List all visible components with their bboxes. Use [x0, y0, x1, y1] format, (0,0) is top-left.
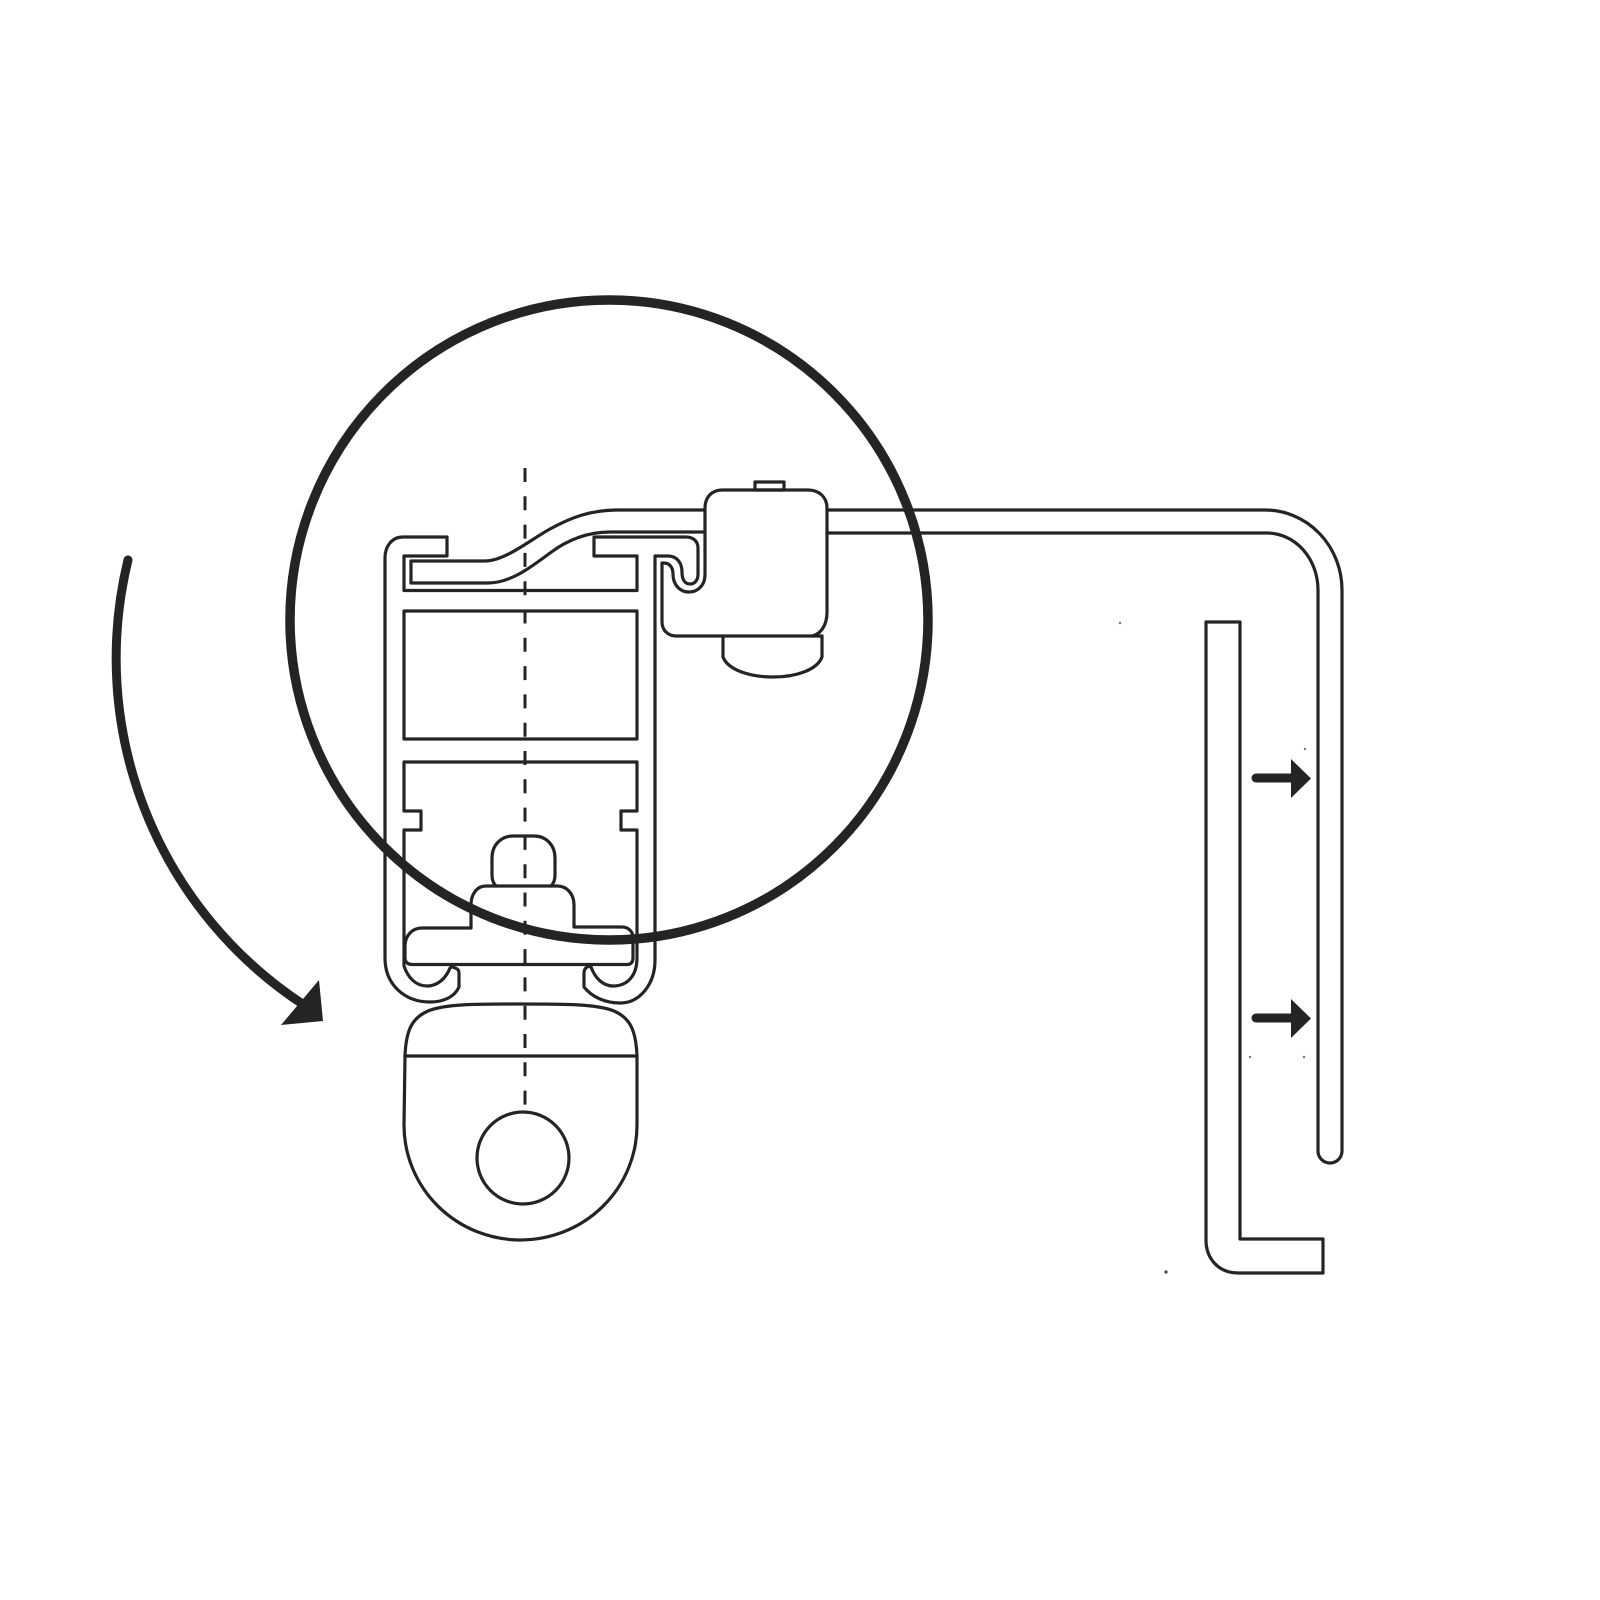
clip block — [662, 482, 827, 677]
slider body — [405, 886, 633, 964]
wall bracket arm — [411, 510, 1342, 1163]
large highlight circle — [290, 300, 928, 940]
track profile — [385, 537, 698, 1003]
mounting plate — [1206, 622, 1323, 1273]
outer wall and lips — [385, 537, 698, 1003]
stray specks — [1119, 622, 1306, 1274]
arrow: upper press — [1256, 759, 1311, 798]
glide roller — [404, 1004, 637, 1240]
arrow: rotation direction — [116, 560, 323, 1025]
centre dashed axis — [524, 468, 526, 1108]
upper chamber — [404, 611, 637, 739]
arrow: lower press — [1256, 999, 1311, 1038]
slider knob — [492, 836, 555, 886]
